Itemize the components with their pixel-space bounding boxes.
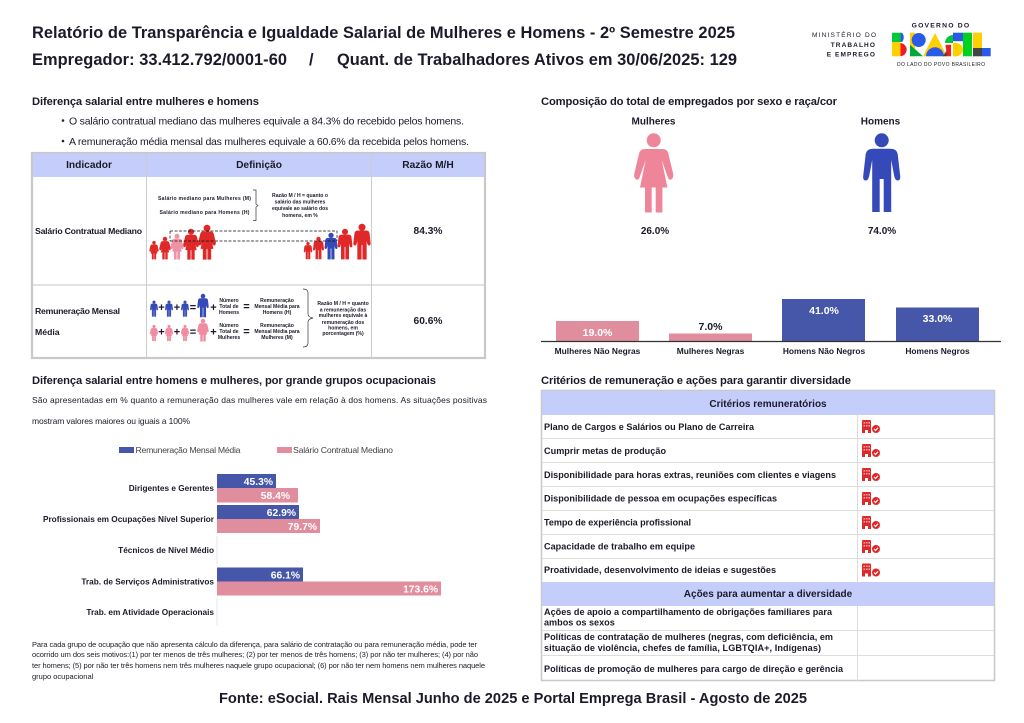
diagram: remuneração média: + [158,326,165,338]
panel: critérios table [542,390,994,681]
row: remuneração mensal média [35,306,442,337]
bar chart: grupos ocupacionais: 66.1% [271,570,300,582]
bar chart: sexo e raça/cor: Mulheres Não Negras [555,346,641,356]
diagram: remuneração média: homens, em [328,326,358,332]
diagram: remuneração média: Mulheres [218,335,240,341]
bar chart: grupos ocupacionais: 173.6% [403,584,438,596]
logo: Governo do Brasil [892,22,991,68]
rows: ações: Ações de apoio a compartilhamento de obrigações familiares para [544,607,833,617]
bar chart: grupos ocupacionais: Profissionais em Ocupações Nível Superior [43,515,215,524]
diagram: remuneração média: Total de [219,329,239,335]
diagram: remuneração média: Mulheres (M) [261,335,293,341]
legend [119,445,393,455]
text block: bullets: O salário contratual mediano das mulheres equivale a 84.3% do recebido pelos homens. [69,116,464,128]
row: remuneração mensal média: 60.6% [414,316,442,327]
diagram: remuneração média: Homens [219,310,239,316]
diagram: remuneração média: Número [219,298,239,304]
people women group [150,225,215,259]
chart: homens pictogram: 74.0% [868,226,896,237]
header: critérios remuneratórios [542,391,994,415]
diagram: remuneração média: + [210,302,217,314]
diagram: remuneração média: remuneração dos [322,320,364,326]
diagram: salário mediano: Razão M / H = quanto o [272,193,328,199]
chart: mulheres pictogram [632,116,676,237]
logo: Ministério do Trabalho e Emprego: MINISTÉRIO DO [812,30,876,39]
title: Relatório de Transparência e Igualdade Salarial de Mulheres e Homens - 2º Semestre 2025 [32,24,735,42]
bar chart: sexo e raça/cor: Homens Não Negros [783,346,866,356]
chart: mulheres pictogram: Mulheres [632,116,676,128]
row: salário contratual mediano: 84.3% [414,226,442,237]
footer: fonte: Fonte: eSocial. Rais Mensal Junho de 2025 e Portal Emprega Brasil - Agosto de 2025 [219,691,807,707]
text block: explicação: São apresentadas em % quanto a remuneração das mulheres vale em relação à dos homens. As situações positivas [32,395,487,405]
diagram: remuneração média: + [174,302,180,314]
title [32,24,737,69]
bar chart: grupos ocupacionais: 58.4% [261,491,290,502]
bar chart: sexo e raça/cor: 7.0% [699,321,723,333]
rows: ações: Políticas de promoção de mulheres para cargo de direção e gerência [544,664,844,674]
rows: critérios [544,422,836,575]
diagram: salário mediano: equivale ao salário dos [272,206,328,212]
legend: Salário Contratual Mediano [293,445,393,455]
rows: ações: ambos os sexos [544,618,615,628]
heading: grandes grupos: Diferença salarial entre homens e mulheres, por grande grupos ocupacionais [32,375,436,387]
logo: Governo do Brasil: GOVERNO DO [912,22,970,30]
bar chart: grupos ocupacionais: Trab. de Serviços Administrativos [81,578,214,586]
diagram: salário mediano: Salário mediano para Homens (H) [160,210,250,216]
diagram: remuneração média: a remuneração das [320,308,366,314]
text block: nota de rodapé: Para cada grupo de ocupação que não apresenta cálculo da diferença, para salário de contratação ou para remuneração média, pode ter [32,640,478,649]
text block: nota de rodapé [32,640,485,681]
logo: Ministério do Trabalho e Emprego: TRABALHO [831,42,876,49]
diagram: remuneração média: Remuneração [260,323,294,329]
text block: bullets [62,116,469,148]
chart: homens pictogram: Homens [861,116,901,128]
diagram: remuneração média: Número [219,323,239,329]
diagram: remuneração média: mulheres equivale à [319,313,368,319]
title: Quant. de Trabalhadores Ativos em 30/06/2025: 129 [337,51,737,69]
title: Empregador: 33.412.792/0001-60 [32,51,287,69]
diagram: remuneração média: = [190,326,196,338]
bar chart: sexo e raça/cor: Mulheres Negras [677,346,745,356]
bar chart: grupos ocupacionais: Técnicos de Nível Médio [118,546,214,555]
diagram: salário mediano: salário das mulheres [275,200,326,206]
table headers: Definição [236,160,282,171]
row: remuneração mensal média: Remuneração Mensal [35,306,120,316]
bar chart: sexo e raça/cor: 19.0% [583,327,613,339]
rows: ações [544,607,844,674]
diagram: remuneração média: + [158,302,165,314]
diagram: remuneração média: porcentagem (%) [322,331,364,337]
diagram: remuneração média: Homens (H) [263,310,292,316]
rows: ações: situação de violência, chefes de família, LGBTQIA+, Indígenas) [544,643,821,653]
chart: mulheres pictogram: 26.0% [641,226,669,237]
rows: critérios: Tempo de experiência profissional [544,518,691,528]
heading: diferença salarial: Diferença salarial entre mulheres e homens [32,96,259,108]
rows: critérios: Disponibilidade para horas extras, reuniões com clientes e viagens [544,470,836,480]
diagram: remuneração média: = [190,302,196,314]
diagram: remuneração média: = [243,301,250,313]
header: critérios remuneratórios: Critérios remuneratórios [709,399,827,410]
bar chart: sexo e raça/cor [541,299,1001,356]
text block: bullets: A remuneração média mensal das mulheres equivale a 60.6% da recebida pelos homens. [69,136,469,148]
row: remuneração mensal média: Média [35,327,60,337]
chart: homens pictogram [861,116,901,237]
diagram: remuneração média: Total de [219,304,239,310]
table headers [66,160,454,171]
diagram: remuneração média: + [174,326,180,338]
row: salário contratual mediano: Salário Contratual Mediano [35,226,142,236]
text block: explicação: mostram valores maiores ou iguais a 100% [32,416,190,426]
bar chart: sexo e raça/cor: 33.0% [923,313,953,325]
header: ações: Ações para aumentar a diversidade [684,589,853,600]
bar chart: sexo e raça/cor: 41.0% [809,305,840,317]
rows: critérios: Disponibilidade de pessoa em ocupações específicas [544,494,777,504]
heading: critérios: Critérios de remuneração e ações para garantir diversidade [541,375,851,387]
text block: nota de rodapé: grupo ocupacional [32,672,94,681]
title: / [309,51,314,69]
table headers: Razão M/H [402,160,454,171]
logo: Ministério do Trabalho e Emprego [812,30,876,58]
rows: critérios: Capacidade de trabalho em equipe [544,542,695,552]
bar chart: sexo e raça/cor: Homens Negros [905,346,970,356]
rows: critérios: Plano de Cargos e Salários ou Plano de Carreira [544,422,755,432]
rows: critérios: Proatividade, desenvolvimento de ideias e sugestões [544,565,776,575]
diagram: salário mediano: homens, em % [282,213,318,219]
diagram: remuneração média: = [243,326,250,338]
people men group [304,224,370,259]
text block: explicação [32,395,487,426]
header: ações [542,582,994,606]
icons: critérios [862,420,880,576]
legend: Remuneração Mensal Média [136,445,241,455]
text block: nota de rodapé: ter homens; (5) por não ter três homens nem três mulheres naquele grupo ocupacional; (6) por não ter nem homens nem mulheres naquele [32,661,485,670]
diagram: remuneração média: Mensal Média para [254,304,300,310]
heading: composição: Composição do total de empregados por sexo e raça/cor [541,96,838,108]
bar chart: grupos ocupacionais [43,474,441,626]
row: salário contratual mediano [35,226,442,237]
diagram: remuneração média [150,289,369,347]
diagram: remuneração média: + [210,326,217,338]
bar chart: grupos ocupacionais: Dirigentes e Gerentes [129,484,214,493]
rows: critérios: Cumprir metas de produção [544,446,666,456]
logo: Ministério do Trabalho e Emprego: E EMPREGO [827,52,876,58]
bar chart: grupos ocupacionais: Trab. em Atividade Operacionais [86,608,214,617]
diagram: salário mediano [150,190,370,259]
diagram: remuneração média: Razão M / H = quanto [317,301,369,307]
text block: nota de rodapé: ocorrido um dos seis motivos:(1) por ter menos de três mulheres; (2) por ter menos de três homens; (3) por não ter mulheres; (4) por não [32,650,478,659]
bar chart: grupos ocupacionais: 79.7% [288,522,317,533]
logo: Governo do Brasil: DO LADO DO POVO BRASILEIRO [897,62,985,68]
table headers: Indicador [66,160,112,171]
diagram: salário mediano: Salário mediano para Mulheres (M) [158,196,251,202]
diagram: remuneração média: Remuneração [260,298,294,304]
diagram: remuneração média: Mensal Média para [254,329,300,335]
bar chart: grupos ocupacionais: 45.3% [244,477,273,488]
bar chart: grupos ocupacionais: 62.9% [267,508,296,519]
rows: ações: Políticas de contratação de mulheres (negras, com deficiência, em [544,632,833,642]
panel: indicator table [32,153,485,358]
